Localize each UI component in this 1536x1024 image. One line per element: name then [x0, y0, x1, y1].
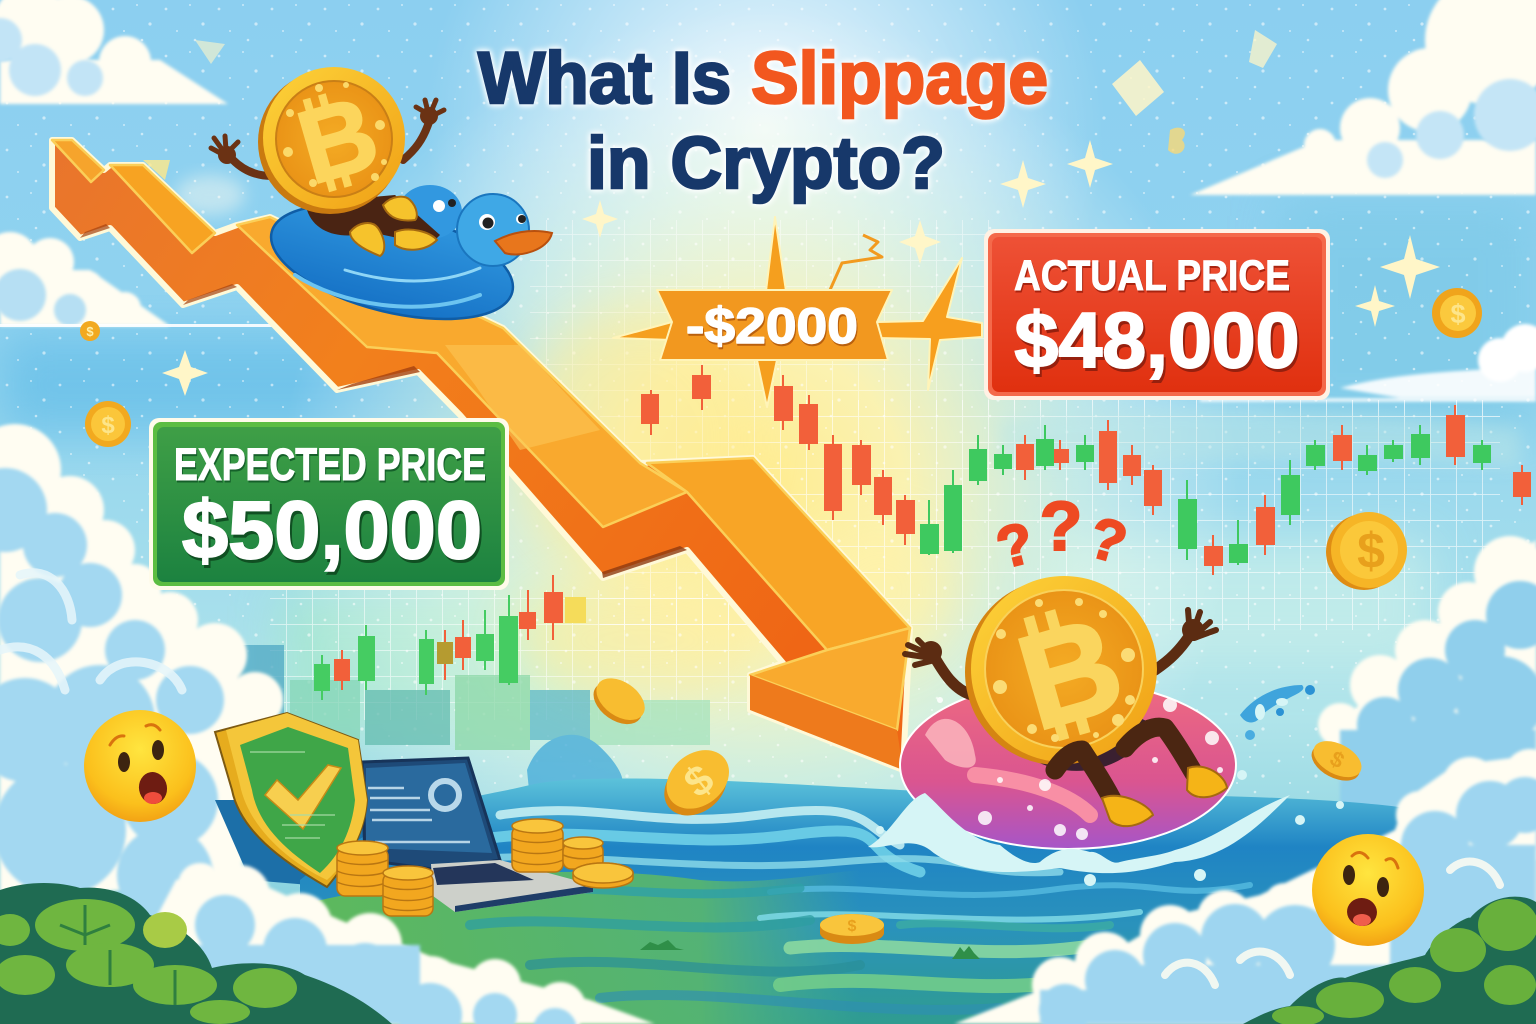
coin: falling small — [586, 670, 652, 733]
arrow silhouette and front faces — [52, 140, 910, 770]
actual price box: $48,000 — [1014, 296, 1300, 384]
blue duck float — [260, 183, 552, 341]
rider legs and feet — [307, 195, 440, 256]
expected price box: EXPECTED PRICE — [174, 439, 486, 490]
arrow glossy highlights — [80, 160, 903, 770]
coin: right upper: $ — [1450, 299, 1466, 329]
coin: right tilted: $ — [1326, 746, 1349, 773]
title — [478, 38, 1048, 204]
pink float with bitcoin rider — [900, 576, 1236, 849]
foliage: bottom left — [0, 883, 392, 1024]
coin: right upper — [1432, 288, 1482, 338]
emoji: surprised left — [84, 710, 196, 822]
title: What Is Slippage — [478, 38, 1048, 119]
lower bitcoin coin — [965, 576, 1157, 765]
expected price box — [149, 418, 509, 590]
shield with check mark — [215, 713, 367, 887]
lower bitcoin coin: B — [1004, 589, 1138, 759]
price difference badge: -$2000 — [686, 298, 858, 354]
coin: right large — [1326, 512, 1407, 590]
question marks: ? — [990, 510, 1040, 581]
gold coin stacks — [337, 819, 633, 916]
coin: falling large: $ — [675, 755, 722, 806]
coin: right large: $ — [1357, 523, 1385, 579]
coin: left small — [80, 321, 100, 341]
candlestick chart: left — [315, 575, 585, 700]
coin: left large — [85, 401, 131, 447]
question marks: ? — [1040, 487, 1082, 565]
expected price box: $50,000 — [182, 485, 482, 576]
coin: right tilted — [1306, 734, 1367, 788]
upper bitcoin coin: B — [286, 75, 390, 207]
water — [300, 779, 1420, 1024]
title: in Crypto? — [587, 123, 945, 204]
chart grid backdrop — [270, 220, 1520, 720]
price difference badge — [613, 217, 982, 407]
actual price box — [984, 229, 1330, 400]
clouds: top right — [1190, 0, 1536, 195]
question marks — [990, 487, 1134, 581]
floating dollar coins — [80, 288, 1482, 944]
coin: left small: $ — [86, 324, 94, 339]
clouds: top left — [0, 0, 228, 104]
candlestick chart: right — [642, 365, 1530, 575]
clouds: bottom left — [100, 863, 655, 1024]
actual price box: ACTUAL PRICE — [1014, 252, 1290, 300]
question marks: ? — [1082, 504, 1134, 577]
sunburst glow near arrow — [520, 310, 760, 570]
distant city blocks — [236, 645, 710, 800]
upper bitcoin coin — [258, 67, 405, 214]
clouds: bottom right — [954, 749, 1536, 1024]
coin: floating on water: $ — [848, 918, 857, 935]
coin: left large: $ — [101, 412, 115, 439]
dark water shadow behind shield — [215, 800, 480, 895]
clouds: left middle — [0, 175, 280, 327]
rider arms — [211, 100, 444, 176]
slippage arrow — [52, 140, 910, 770]
duck float with bitcoin rider — [211, 67, 552, 341]
arrow top faces — [52, 140, 910, 730]
pink inner tube — [900, 681, 1236, 849]
lower rider legs — [1055, 727, 1227, 826]
coin: falling large — [650, 738, 743, 828]
water splash around float — [868, 685, 1344, 886]
coin: floating on water — [820, 914, 884, 944]
laptop — [362, 758, 593, 912]
clouds: left lower — [0, 424, 283, 923]
foliage: bottom right — [1243, 897, 1536, 1024]
emoji: surprised right — [1312, 834, 1424, 946]
lower rider arms — [905, 610, 1216, 695]
clouds: right lower — [1318, 536, 1536, 860]
clouds: right middle — [1200, 324, 1536, 400]
sparkle stars — [162, 30, 1440, 396]
